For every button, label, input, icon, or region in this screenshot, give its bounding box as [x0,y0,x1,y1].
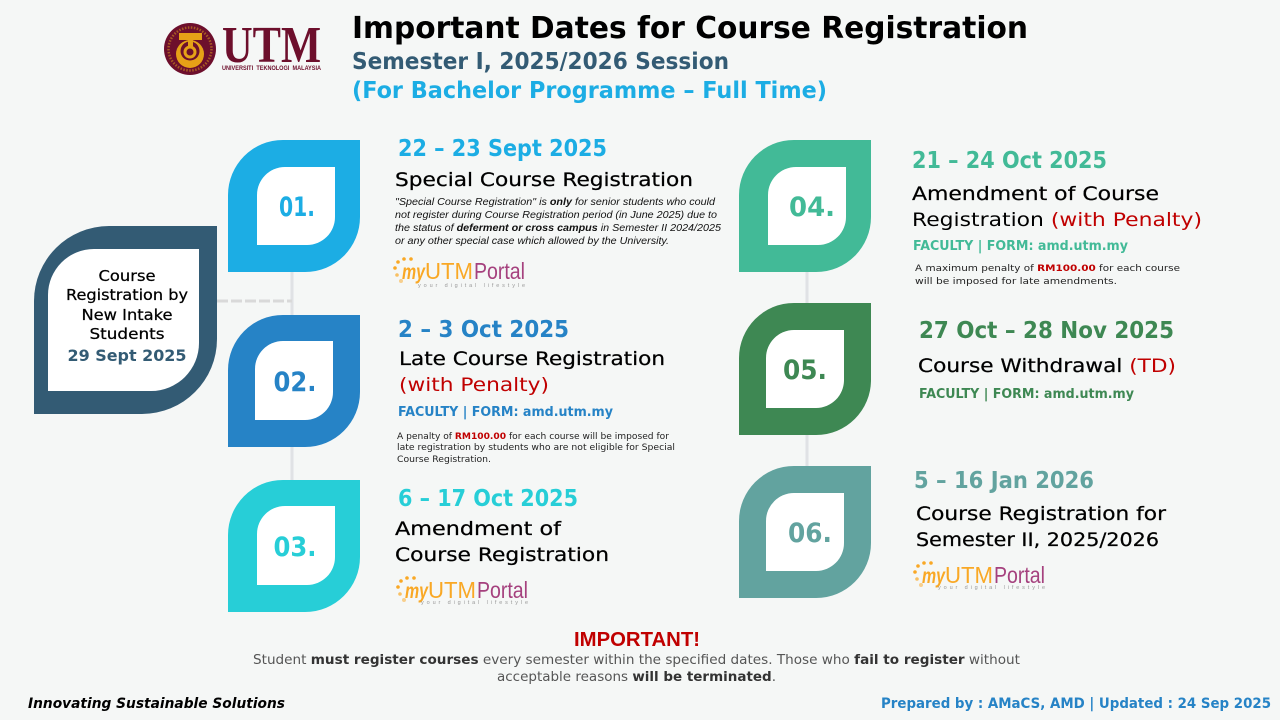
panel: new intake students: Course [98,267,156,285]
logo: myUTM Portal: my [402,261,426,284]
logo: UTM [164,17,321,75]
logo: UTM: UNIVERSITI TEKNOLOGI MALAYSIA [222,65,321,72]
logo: myUTM Portal [393,257,525,289]
logo: myUTM Portal: UTM [425,258,473,284]
step 05 text: 27 Oct – 28 Nov 2025 [919,318,1174,344]
step 03 badge: 03. [274,532,316,563]
logo: myUTM Portal [913,561,1045,591]
panel: new intake students: Students [90,325,165,343]
step 02 text: (with Penalty) [399,374,549,396]
step 02 badge: 02. [274,367,316,398]
step 06 text: Course Registration for [916,503,1166,525]
step 06 text: Semester II, 2025/2026 [916,529,1159,551]
step 02 text: late registration by students who are not eligible for Special [397,443,675,453]
step 05 text [918,318,1176,402]
step 01 text: 22 – 23 Sept 2025 [398,136,607,162]
panel: new intake students: New Intake [82,306,172,324]
step 02 text: 2 – 3 Oct 2025 [398,317,569,343]
step 01 text: "Special Course Registration" is only for senior students who could [395,197,715,208]
step 05 badge [739,303,871,435]
step 02 text: A penalty of RM100.00 for each course will be imposed for [397,432,670,442]
panel: new intake students: Registration by [66,286,188,304]
step 06 badge [739,466,871,598]
step 05 text: Course Withdrawal (TD) [918,355,1176,377]
logo: myUTM Portal: Portal [994,562,1045,588]
step 01 text: Special Course Registration [395,169,693,191]
logo: myUTM Portal: my [922,565,946,588]
logo: myUTM Portal [396,576,528,606]
step 02 text: FACULTY | FORM: amd.utm.my [398,405,614,420]
footer: tagline: Innovating Sustainable Solutions [28,696,285,712]
step 03 text: Amendment of [395,518,563,540]
step 01 badge: 01. [279,192,315,223]
title: Important Dates for Course Registration [352,11,1028,46]
step 05 badge: 05. [783,355,827,386]
step 03 text: 6 – 17 Oct 2025 [398,486,578,512]
step 01 text: not register during Course Registration period (in June 2025) due to [395,210,717,221]
step 01 badge [228,140,360,272]
callout: important notice: Student must register courses every semester within the specified dates. Those who fail to register without [253,652,1020,668]
step 03 text: Course Registration [395,544,609,566]
step 04 text: Amendment of Course [912,183,1159,205]
step 04 text [912,148,1202,287]
logo: myUTM Portal: your digital lifestyle [421,600,528,606]
step 02 badge [228,315,360,447]
step 06 badge: 06. [788,518,832,549]
step 04 text: will be imposed for late amendments. [915,277,1117,287]
step 04 text: 21 – 24 Oct 2025 [912,148,1107,174]
step 04 text: A maximum penalty of RM100.00 for each course [915,264,1180,274]
step 01 text [395,136,721,247]
logo: myUTM Portal: Portal [477,577,528,603]
subtitle: programme: (For Bachelor Programme – Full Time) [352,78,827,104]
step 02 text: Course Registration. [397,455,491,465]
callout: important notice [253,629,1020,685]
subtitle: session: Semester I, 2025/2026 Session [352,49,729,75]
step 02 text [397,317,675,465]
step 04 text: FACULTY | FORM: amd.utm.my [913,239,1129,254]
step 03 text [395,486,609,566]
logo: UTM: UTM [222,17,321,74]
logo: myUTM Portal: UTM [428,577,476,603]
logo: myUTM Portal: your digital lifestyle [418,283,525,289]
step 04 badge [739,140,871,272]
panel: new intake students [34,226,217,414]
footer: prepared by: Prepared by : AMaCS, AMD | Updated : 24 Sep 2025 [881,696,1271,712]
panel: new intake students: 29 Sept 2025 [68,346,186,365]
step 01 text: or any other special case which allowed by the University. [395,236,669,247]
logo: myUTM Portal: your digital lifestyle [938,585,1045,591]
logo: myUTM Portal: my [405,580,429,603]
step 06 text [914,468,1166,551]
logo: myUTM Portal: Portal [474,258,525,284]
logo: myUTM Portal: UTM [945,562,993,588]
callout: important notice: acceptable reasons will be terminated. [497,669,776,685]
step 04 text: Registration (with Penalty) [912,209,1202,231]
step 06 text: 5 – 16 Jan 2026 [914,468,1094,494]
step 02 text: Late Course Registration [399,348,665,370]
step 04 badge: 04. [789,192,835,223]
step 01 text: the status of deferment or cross campus in Semester II 2024/2025 [395,223,721,234]
step 05 text: FACULTY | FORM: amd.utm.my [919,387,1135,402]
callout: important notice: IMPORTANT! [574,629,700,651]
step 03 badge [228,480,360,612]
